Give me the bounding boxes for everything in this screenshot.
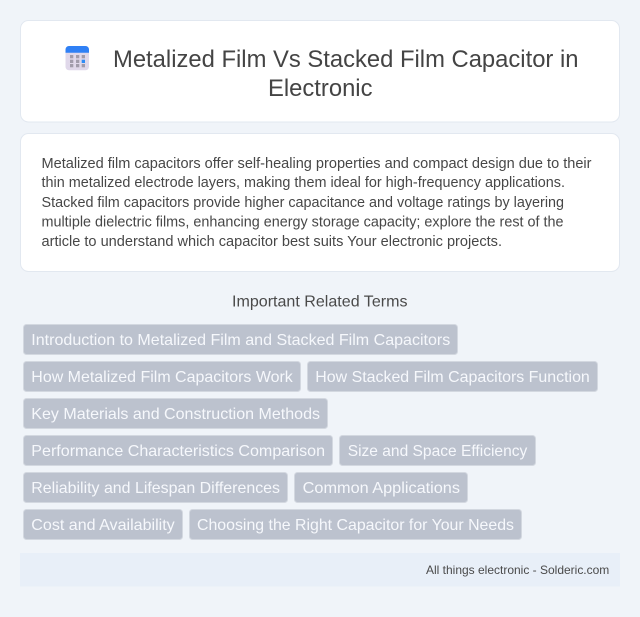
panel: summary text <box>20 134 620 272</box>
tag: introduction: Introduction to Metalized Film and Stacked Film Capacitors <box>31 332 450 349</box>
title <box>113 46 578 102</box>
text block: summary: Stacked film capacitors provide higher capacitance and voltage ratings by layering <box>42 195 564 211</box>
tag: how metalized film capacitors work: How Metalized Film Capacitors Work <box>31 369 294 386</box>
tag: how stacked film capacitors function <box>308 362 598 392</box>
footer: All things electronic - Solderic.com <box>426 563 609 577</box>
tag: introduction <box>24 324 458 354</box>
tag: common applications: Common Applications <box>303 480 460 497</box>
tag: key materials <box>24 398 328 428</box>
tag: performance <box>24 436 332 466</box>
title: Metalized Film Vs Stacked Film Capacitor in <box>113 46 578 73</box>
tag: reliability: Reliability and Lifespan Differences <box>31 480 280 497</box>
tag: choosing <box>190 510 522 540</box>
footer <box>20 553 620 586</box>
tag: size and space <box>340 436 536 466</box>
title: Electronic <box>268 75 372 102</box>
tag: choosing: Choosing the Right Capacitor for Your Needs <box>197 517 514 534</box>
tag list <box>24 324 598 540</box>
icon: calendar <box>66 46 89 70</box>
panel: header <box>20 20 620 122</box>
text block: summary: article to understand which capacitor best suits Your electronic projects. <box>42 234 502 250</box>
text block: summary <box>42 156 592 250</box>
tag: key materials: Key Materials and Construction Methods <box>31 406 320 423</box>
text block: summary: thin metalized electrode layers, making them ideal for high-frequency applications. <box>42 175 565 191</box>
tag: common applications <box>294 472 468 502</box>
tag: performance: Performance Characteristics Comparison <box>31 443 325 460</box>
tag: reliability <box>24 472 288 502</box>
tag: cost: Cost and Availability <box>31 517 175 534</box>
tag: how stacked film capacitors function: How Stacked Film Capacitors Function <box>315 369 590 386</box>
text block: summary: Metalized film capacitors offer self-healing properties and compact design due to their <box>42 156 592 172</box>
heading: important related terms: Important Related Terms <box>232 294 408 310</box>
tag: size and space: Size and Space Efficiency <box>348 443 527 460</box>
tag: cost <box>24 510 182 540</box>
tag: how metalized film capacitors work <box>24 362 300 392</box>
text block: summary: multiple dielectric films, enhancing energy storage capacity; explore the rest of the <box>42 214 564 230</box>
